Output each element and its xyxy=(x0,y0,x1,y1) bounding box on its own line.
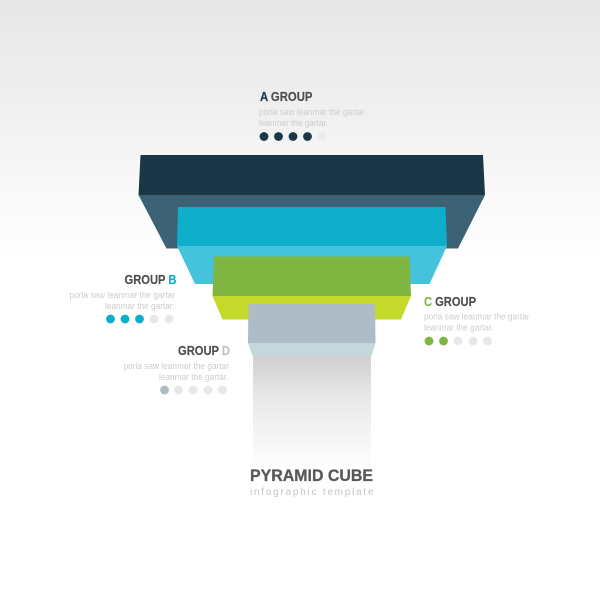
layer D: grey block xyxy=(248,304,376,356)
heading: D group: GROUP D xyxy=(178,344,230,358)
layer C: green block xyxy=(212,256,411,320)
rating dots: C group xyxy=(425,337,492,345)
rating dots: B group xyxy=(106,315,173,323)
description: B group xyxy=(70,290,175,311)
label: B group xyxy=(70,273,176,323)
description: D group: porla saw leanmar the gartar xyxy=(124,361,229,371)
description: C group: leanmar the gartar. xyxy=(424,322,494,332)
description: A group: leanmar the gartar. xyxy=(259,118,328,128)
heading: C group: C GROUP xyxy=(424,295,476,309)
heading: B group: GROUP B xyxy=(124,273,176,287)
label: C group xyxy=(424,295,530,345)
description: C group: porla saw leanmar the gartar xyxy=(424,312,530,322)
description: B group: porla saw leanmar the gartar xyxy=(70,290,175,300)
heading: A group: A GROUP xyxy=(260,90,312,104)
layer A: dark navy block xyxy=(138,155,485,248)
label: A group xyxy=(259,90,364,141)
floor shadow xyxy=(253,356,371,472)
rating dots: A group xyxy=(260,132,326,141)
subtitle: infographic template xyxy=(250,487,374,498)
label: D group xyxy=(124,344,230,394)
layer B: blue block xyxy=(177,207,447,284)
description: A group xyxy=(259,107,364,128)
description: B group: leanmar the gartar. xyxy=(105,301,174,311)
rating dots: D group xyxy=(160,386,227,394)
title: PYRAMID CUBE xyxy=(250,466,373,485)
description: A group: porla saw leanmar the gartar xyxy=(259,107,364,117)
description: D group: leanmar the gartar. xyxy=(159,372,228,382)
description: D group xyxy=(124,361,229,382)
title block xyxy=(250,466,374,498)
background gradient xyxy=(0,0,600,262)
pyramid cube xyxy=(138,155,485,472)
description: C group xyxy=(424,312,530,332)
